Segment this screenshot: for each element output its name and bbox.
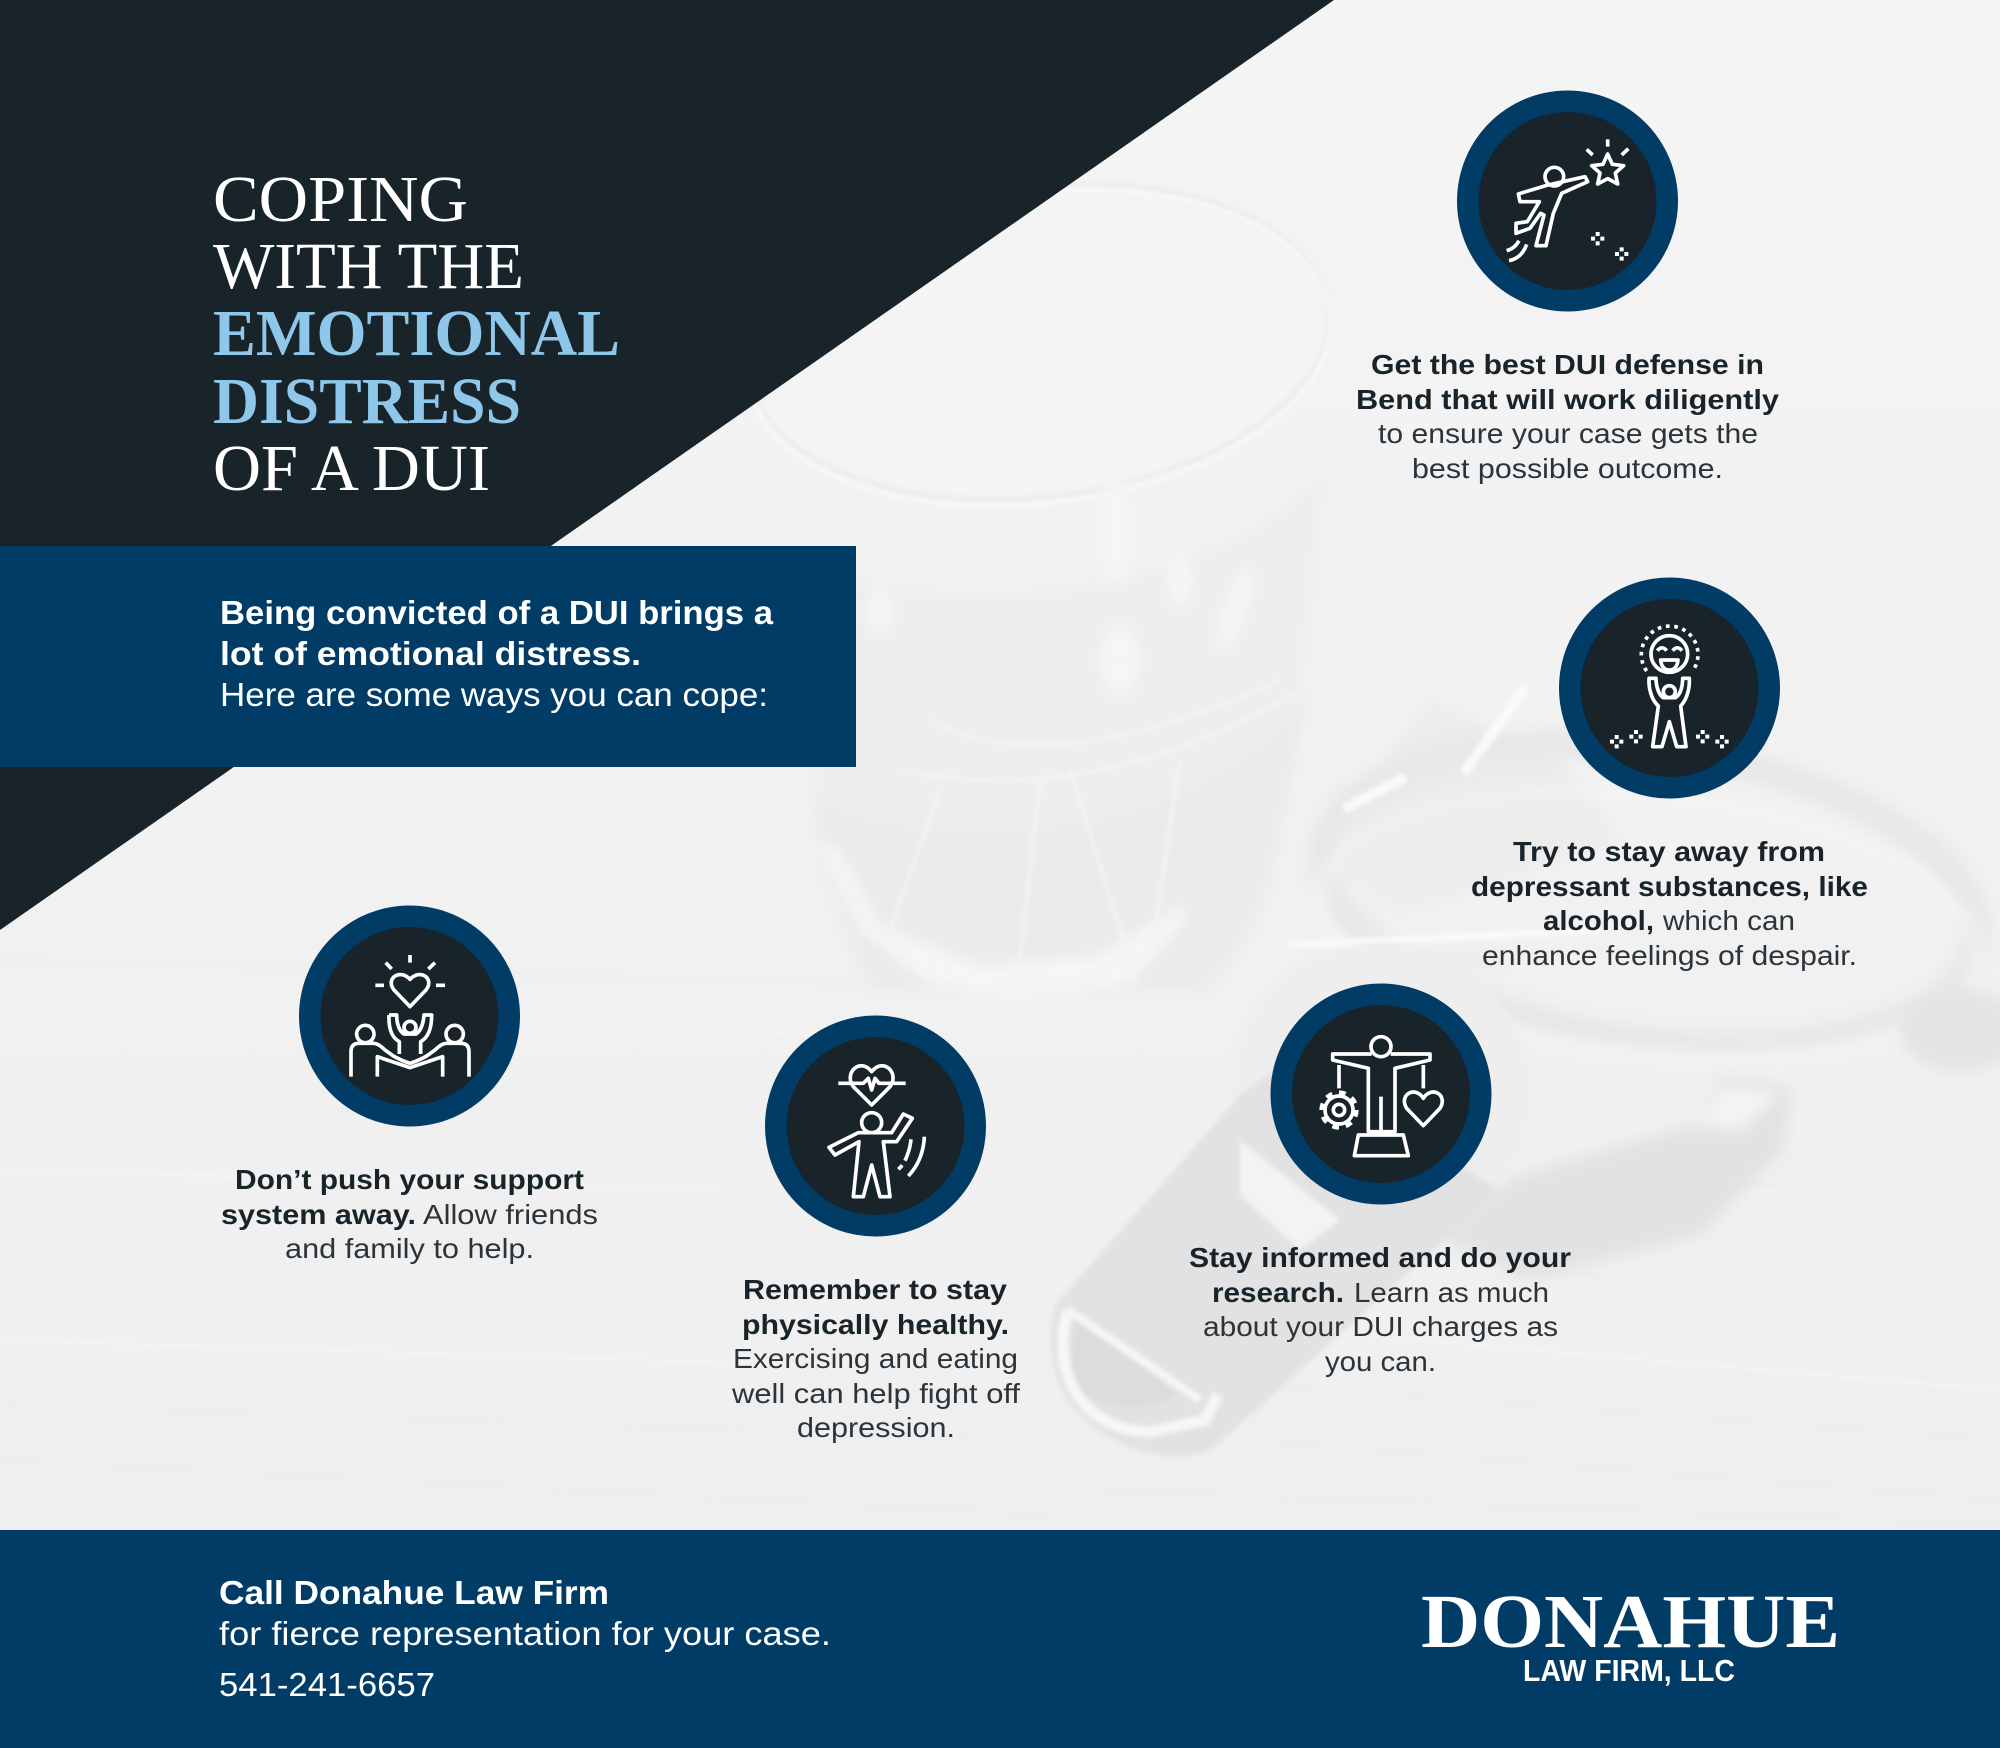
text: physical health: depression. (797, 1412, 955, 1443)
text: physical health: Remember to stay (743, 1274, 1008, 1305)
intro text (220, 594, 774, 713)
icon: person reaching for star (1457, 90, 1678, 312)
icon: happy person lifting smiling face (1559, 578, 1780, 798)
title: WITH THE (213, 230, 524, 303)
title: COPING (213, 163, 468, 236)
intro panel (0, 546, 856, 767)
footer call to action: 541-241-6657 (219, 1666, 435, 1703)
title: OF A DUI (213, 432, 490, 505)
icon: exercising person with heartbeat (765, 1016, 986, 1236)
logo: DONAHUE (1421, 1580, 1840, 1664)
item: best DUI defense (1356, 90, 1780, 484)
item: support system (221, 906, 598, 1264)
intro text: Here are some ways you can cope: (220, 676, 768, 713)
background bottle opener (1051, 944, 1531, 1456)
text: support system: Allow friends (423, 1199, 598, 1230)
text: stay informed: about your DUI charges as (1203, 1311, 1558, 1342)
text: physical health: well can help fight off (731, 1378, 1020, 1409)
text: avoid depressants: enhance feelings of despair. (1482, 940, 1857, 971)
text: physical health (731, 1274, 1020, 1443)
text: stay informed: you can. (1325, 1346, 1436, 1377)
text: support system: and family to help. (285, 1233, 534, 1264)
item: stay informed (1189, 984, 1571, 1377)
item: physical health (731, 1016, 1020, 1443)
text: avoid depressants: alcohol, (1543, 905, 1654, 936)
footer call to action (219, 1574, 831, 1703)
text: support system (221, 1164, 598, 1264)
text: physical health: physically healthy. (742, 1309, 1009, 1340)
logo: LAW FIRM, LLC (1523, 1653, 1735, 1688)
title (213, 163, 620, 505)
icon: supporting friends with heart (299, 906, 520, 1126)
footer call to action: for fierce representation for your case. (219, 1615, 831, 1652)
text: support system: Don’t push your support (235, 1164, 584, 1195)
icon: balance figure with gear and heart (1270, 984, 1492, 1204)
text: avoid depressants: Try to stay away from (1513, 836, 1825, 867)
intro text: lot of emotional distress. (220, 635, 641, 672)
text: physical health: Exercising and eating (733, 1343, 1018, 1374)
background handcuffs (1250, 705, 2000, 1280)
footer call to action: Call Donahue Law Firm (219, 1574, 609, 1611)
text: stay informed: research. (1212, 1277, 1344, 1308)
text: best DUI defense: best possible outcome. (1412, 453, 1723, 484)
title: EMOTIONAL (213, 297, 620, 370)
intro text: Being convicted of a DUI brings a (220, 594, 774, 631)
text: stay informed: Stay informed and do your (1189, 1242, 1571, 1273)
text: stay informed: Learn as much (1354, 1277, 1549, 1308)
text: best DUI defense (1356, 349, 1780, 484)
item: avoid depressants (1471, 578, 1868, 971)
text: stay informed (1189, 1242, 1571, 1377)
text: avoid depressants: which can (1662, 905, 1795, 936)
text: best DUI defense: Get the best DUI defense in (1371, 349, 1764, 380)
text: best DUI defense: to ensure your case gets the (1378, 418, 1758, 449)
footer band (0, 1530, 2000, 1748)
text: support system: system away. (221, 1199, 416, 1230)
title: DISTRESS (213, 365, 521, 438)
dark diagonal panel (0, 0, 1334, 930)
text: avoid depressants (1471, 836, 1868, 971)
text: best DUI defense: Bend that will work diligently (1356, 384, 1780, 415)
text: avoid depressants: depressant substances, like (1471, 871, 1868, 902)
